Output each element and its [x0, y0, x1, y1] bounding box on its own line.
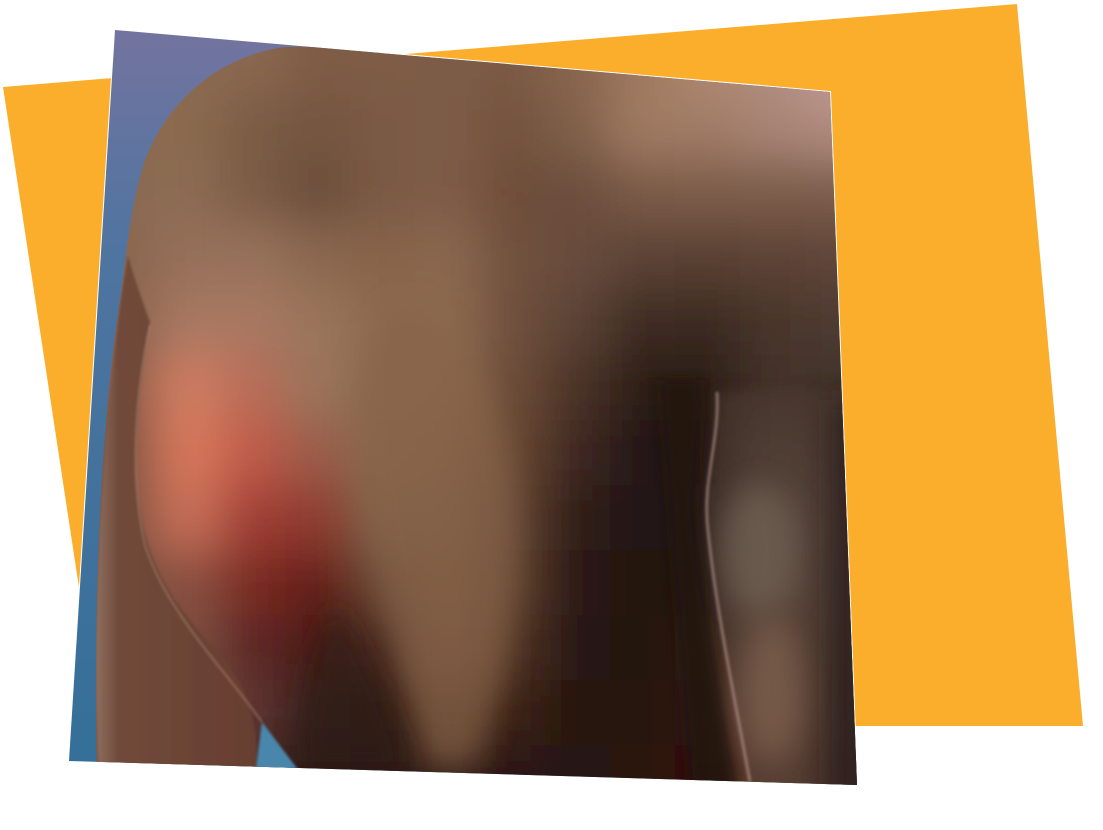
right arm outer shadow	[832, 400, 872, 800]
right arm lower tone	[708, 390, 857, 785]
blue background	[60, 20, 860, 800]
body with blended tones	[96, 46, 857, 785]
right arm highlight	[722, 485, 798, 615]
right arm lower highlight	[744, 620, 800, 760]
right armpit shadow	[660, 380, 738, 790]
armpit gap sky	[254, 722, 299, 768]
rim highlight: right armpit	[707, 392, 750, 782]
left arm	[96, 255, 257, 790]
dark wedge beside band	[300, 604, 408, 772]
white photo edge	[69, 30, 857, 785]
central back light band	[378, 420, 529, 773]
photo: shoulder	[69, 30, 857, 785]
tone mesh	[96, 46, 857, 785]
rim highlight: deltoid crease	[136, 325, 262, 722]
